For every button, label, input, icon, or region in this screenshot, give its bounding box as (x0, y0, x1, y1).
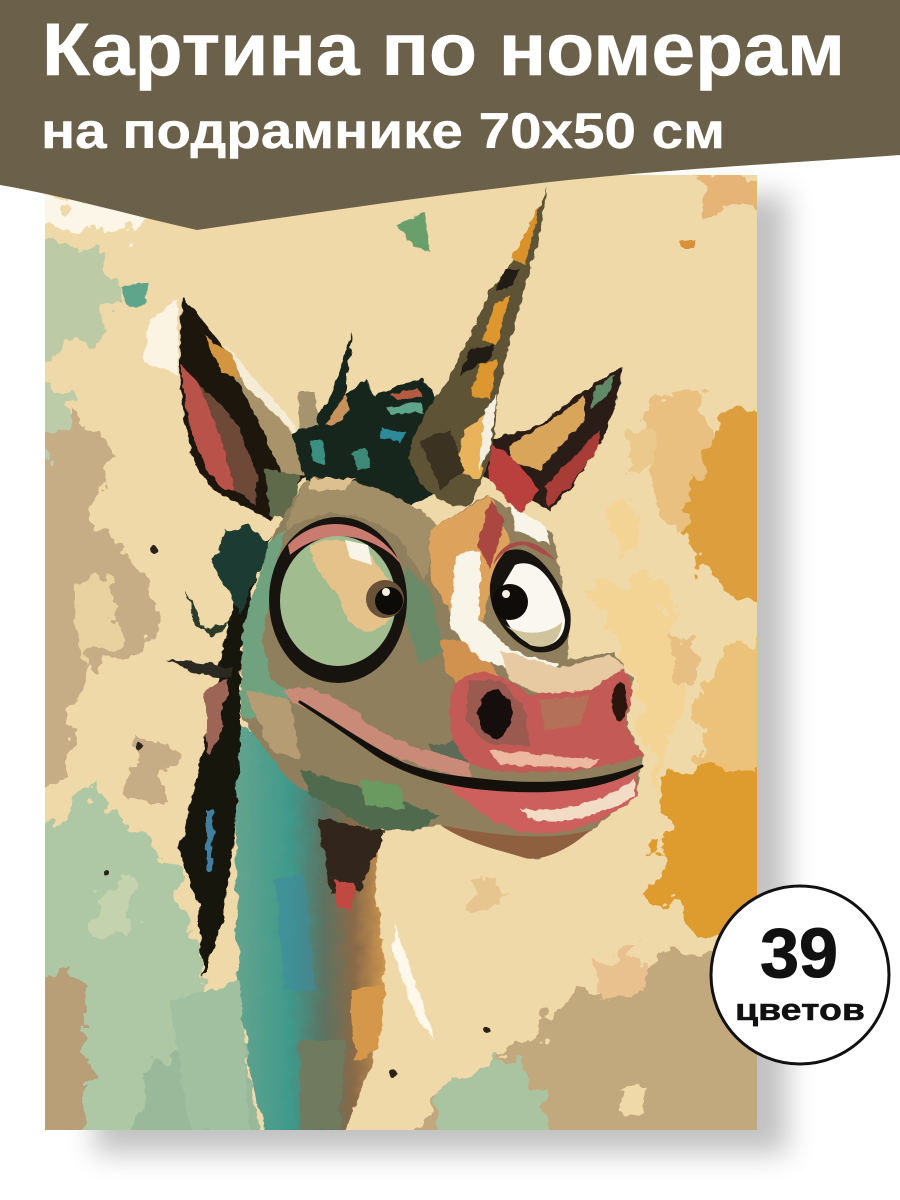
left eye (269, 517, 407, 683)
tan bottom right (414, 946, 757, 1130)
eyelid crease (288, 524, 402, 565)
mane (165, 525, 270, 978)
sage lower left (45, 780, 208, 1130)
white blaze (450, 550, 560, 675)
green side of face (240, 530, 295, 720)
sage upper left (45, 238, 122, 362)
right ear (480, 368, 622, 515)
mottled orange (650, 395, 720, 540)
upper right light orange (695, 170, 770, 215)
painted background patches (30, 170, 770, 1150)
upper lip streak (283, 688, 470, 778)
badge label: цветов (735, 992, 865, 1027)
title: Картина по номерам (42, 8, 845, 91)
right iris (492, 584, 528, 620)
unicorn (165, 188, 643, 1135)
left ear (180, 297, 305, 520)
canvas shadow (95, 195, 787, 1153)
orange forehead (428, 495, 510, 622)
chin (440, 825, 590, 859)
nostrils (478, 690, 512, 738)
orange dash (678, 240, 695, 248)
deep orange lower right (642, 762, 757, 938)
canvas base colour (45, 175, 757, 1130)
cream muzzle top (500, 650, 630, 695)
badge number: 39 (760, 914, 838, 992)
painting canvas (30, 170, 770, 1150)
snout (450, 668, 643, 772)
green spot (397, 212, 430, 252)
teal spot (120, 282, 148, 308)
right eye (490, 541, 571, 652)
tan left side (30, 415, 160, 790)
forehead band (285, 479, 437, 580)
lower jaw green (300, 770, 440, 830)
subtitle: на подрамнике 70х50 см (41, 103, 725, 159)
mouth line (300, 702, 642, 791)
lower lip (440, 772, 638, 833)
left iris (366, 580, 404, 618)
white strokes by the neck (392, 925, 435, 1040)
header banner (0, 0, 900, 230)
tan upper eyeball (310, 540, 395, 631)
neck (170, 720, 385, 1135)
white near ear (143, 298, 178, 375)
forelock (292, 330, 445, 510)
badge: 39 colours (711, 886, 889, 1064)
small paint marks (103, 212, 695, 1077)
head (240, 476, 643, 860)
black splatters (103, 546, 490, 1077)
tan cheek (245, 690, 300, 760)
white upper left (40, 195, 140, 238)
horn (408, 188, 547, 506)
